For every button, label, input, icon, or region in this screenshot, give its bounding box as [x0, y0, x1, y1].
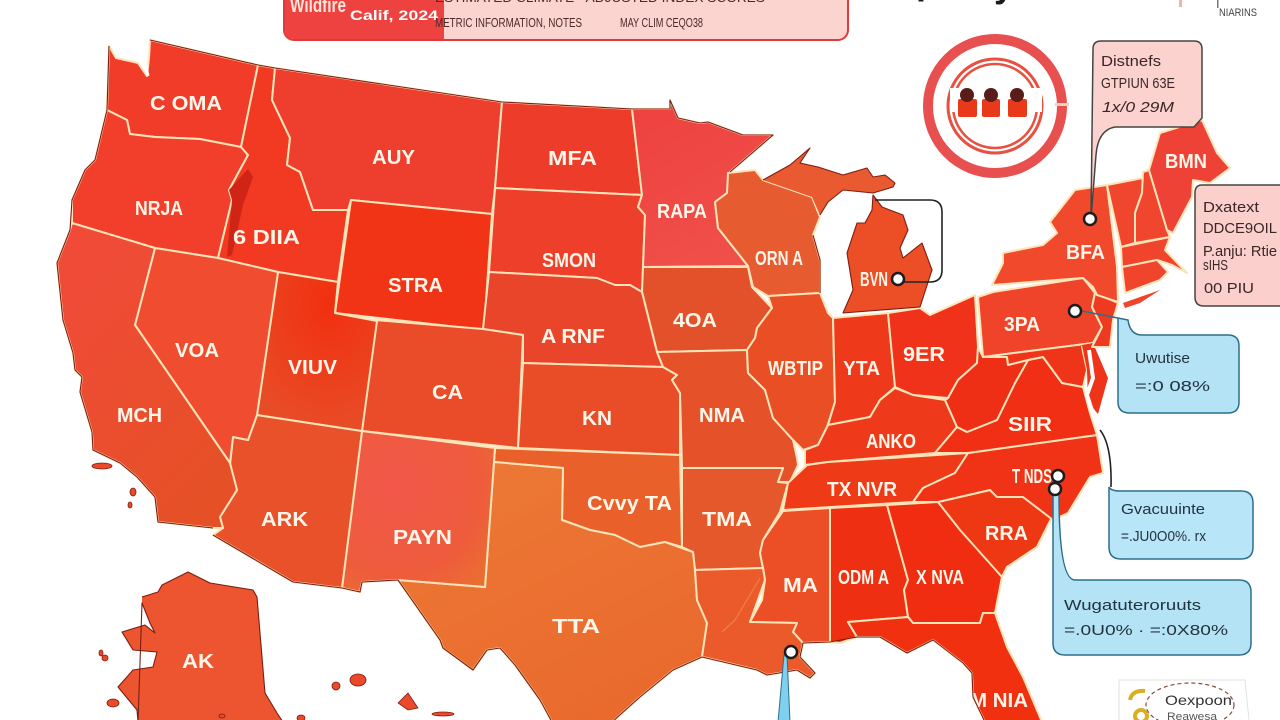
delmarva peninsula [1082, 343, 1108, 414]
state IA [642, 267, 772, 352]
state SC [938, 490, 1052, 577]
state FL: M NIA [970, 690, 1028, 712]
state FL [848, 613, 1042, 720]
state SC: RRA [985, 523, 1028, 545]
callout: blue Pennsylvania [1069, 305, 1239, 413]
state NE [483, 272, 663, 367]
state PA: 3PA [1004, 314, 1040, 336]
callout: pink top: 1x/0 29M [1102, 99, 1175, 116]
puget sound [145, 62, 148, 76]
state WY: STRA [388, 275, 443, 297]
state AK [118, 572, 283, 720]
state TX [398, 462, 707, 720]
state PA [978, 278, 1102, 357]
callout: blue Wilmington [1049, 470, 1251, 655]
state KS: KN [582, 408, 612, 430]
state MD [983, 343, 1093, 387]
marker: New York [1084, 213, 1096, 225]
state MS: MA [783, 575, 818, 597]
state SD: SMON [542, 250, 596, 272]
callout: pink right: P.anju: Rtie [1203, 243, 1277, 260]
state ID: 6 DIIA [233, 227, 300, 249]
callout: pink right: sIHS [1203, 257, 1228, 274]
state MN [632, 100, 773, 267]
state MI lower peninsula: BVN [860, 269, 888, 291]
state TN [783, 453, 968, 510]
state WI [715, 170, 820, 296]
state NM [342, 431, 495, 592]
emblem: target circle [928, 39, 1069, 173]
callout leader: Louisiana [778, 646, 797, 720]
callout: blue Carolina: =.JU0O0%. rx [1121, 528, 1206, 545]
state UT: VIUV [288, 357, 338, 379]
state ME [1149, 120, 1230, 233]
long island [1123, 290, 1160, 308]
state MO [657, 350, 798, 482]
state IL: WBTIP [768, 358, 823, 380]
state NH [1135, 170, 1170, 243]
banner description line two: METRIC INFORMATION, NOTES [435, 15, 582, 30]
legend box [1119, 680, 1249, 720]
banner date: Calif, 2024 [350, 7, 438, 23]
icon: three red figures [958, 88, 1027, 117]
state CO: CA [432, 382, 463, 404]
top right notes [1179, 0, 1257, 19]
state OK [494, 448, 682, 547]
state MI upper peninsula [763, 148, 895, 215]
state OR [72, 110, 248, 258]
state ME: BMN [1165, 151, 1207, 173]
state NY [992, 185, 1118, 302]
state IL [747, 293, 835, 450]
callout: pink top: Distnefs [1101, 53, 1161, 70]
state OK: Cvvy TA [587, 493, 672, 515]
state OH: 9ER [903, 344, 946, 366]
state MA [1121, 237, 1187, 273]
state NC: T NDS [1012, 466, 1052, 488]
header banner [284, 0, 848, 40]
state WV [945, 347, 1028, 432]
state TN: TX NVR [827, 479, 898, 501]
chesapeake bay [1087, 350, 1095, 420]
state VA: SIIR [1008, 414, 1053, 436]
callout: blue Wilmington: Wugatuteroruuts [1064, 597, 1201, 614]
state NV [135, 248, 278, 463]
callout: blue Carolina: Gvacuuinte [1121, 501, 1205, 518]
state SD [489, 188, 645, 292]
state ND [495, 102, 642, 195]
state IN: YTA [843, 358, 880, 380]
state CT and RI [1122, 260, 1168, 293]
state WA: C OMA [150, 93, 222, 115]
state KY: ANKO [866, 431, 916, 453]
state AZ: ARK [261, 509, 309, 531]
state MO: NMA [699, 405, 745, 427]
state AZ [213, 415, 362, 588]
state OH [888, 295, 978, 398]
state UT [257, 272, 377, 431]
title fragments [916, 0, 1014, 5]
callout: pink right: 00 PIU [1204, 280, 1254, 297]
state IN [828, 313, 895, 425]
callout leader: Michigan [875, 200, 942, 285]
state NY: BFA [1066, 242, 1105, 264]
gulf streak on Louisiana [722, 578, 760, 632]
state MT: AUY [372, 147, 416, 169]
state VT [1107, 178, 1143, 247]
state AR: TMA [702, 509, 752, 531]
state WA [107, 40, 258, 147]
state AL [830, 505, 908, 643]
state NE: A RNF [541, 326, 605, 348]
coastlines [57, 40, 985, 720]
icon: gold legend markers [1130, 691, 1147, 720]
state WY [335, 200, 492, 330]
state NC [913, 435, 1103, 520]
legend box: Oexpoon [1165, 692, 1232, 708]
state GA [887, 502, 1002, 623]
callout: blue Pennsylvania: =:0 08% [1135, 378, 1210, 395]
callout: pink top: GTPIUN 63E [1101, 75, 1175, 92]
callout: pink right: Dxatext [1203, 199, 1260, 216]
state KY [805, 388, 957, 465]
state OR: NRJA [135, 198, 183, 220]
callout: pink right: DDCE9OIL [1203, 220, 1277, 237]
top right notes: NIARINS [1219, 7, 1257, 19]
state AL: ODM A [838, 567, 889, 589]
callout: pink top [1091, 41, 1202, 218]
state CO [362, 320, 523, 448]
callout: blue Pennsylvania: Uwutise [1135, 350, 1190, 367]
state MS [750, 508, 830, 643]
callout: blue Carolina [1100, 430, 1253, 559]
state TX: TTA [552, 616, 600, 638]
state ID [218, 65, 348, 282]
state KS [518, 363, 680, 455]
state NV: VOA [175, 340, 219, 362]
state MT [272, 68, 502, 214]
state LA [695, 568, 815, 678]
state NJ and DE [1092, 293, 1118, 347]
state GA: X NVA [916, 567, 964, 589]
state AR [682, 468, 788, 570]
state MN: RAPA [657, 201, 707, 223]
state ND: MFA [548, 148, 597, 170]
callout: pink right [1195, 185, 1280, 306]
state IA: 4OA [673, 310, 717, 332]
state CA [57, 223, 237, 528]
islands [92, 463, 454, 720]
state WI: ORN A [755, 248, 803, 270]
banner source text: MAY CLIM CEQO38 [620, 15, 703, 30]
state AK: AK [182, 651, 215, 673]
callout: blue Wilmington: =.0U0% · =:0X80% [1064, 622, 1228, 639]
state VA [935, 357, 1097, 453]
state CA: MCH [117, 405, 162, 427]
state NM: PAYN [393, 527, 452, 549]
state MI lower peninsula [843, 195, 932, 313]
